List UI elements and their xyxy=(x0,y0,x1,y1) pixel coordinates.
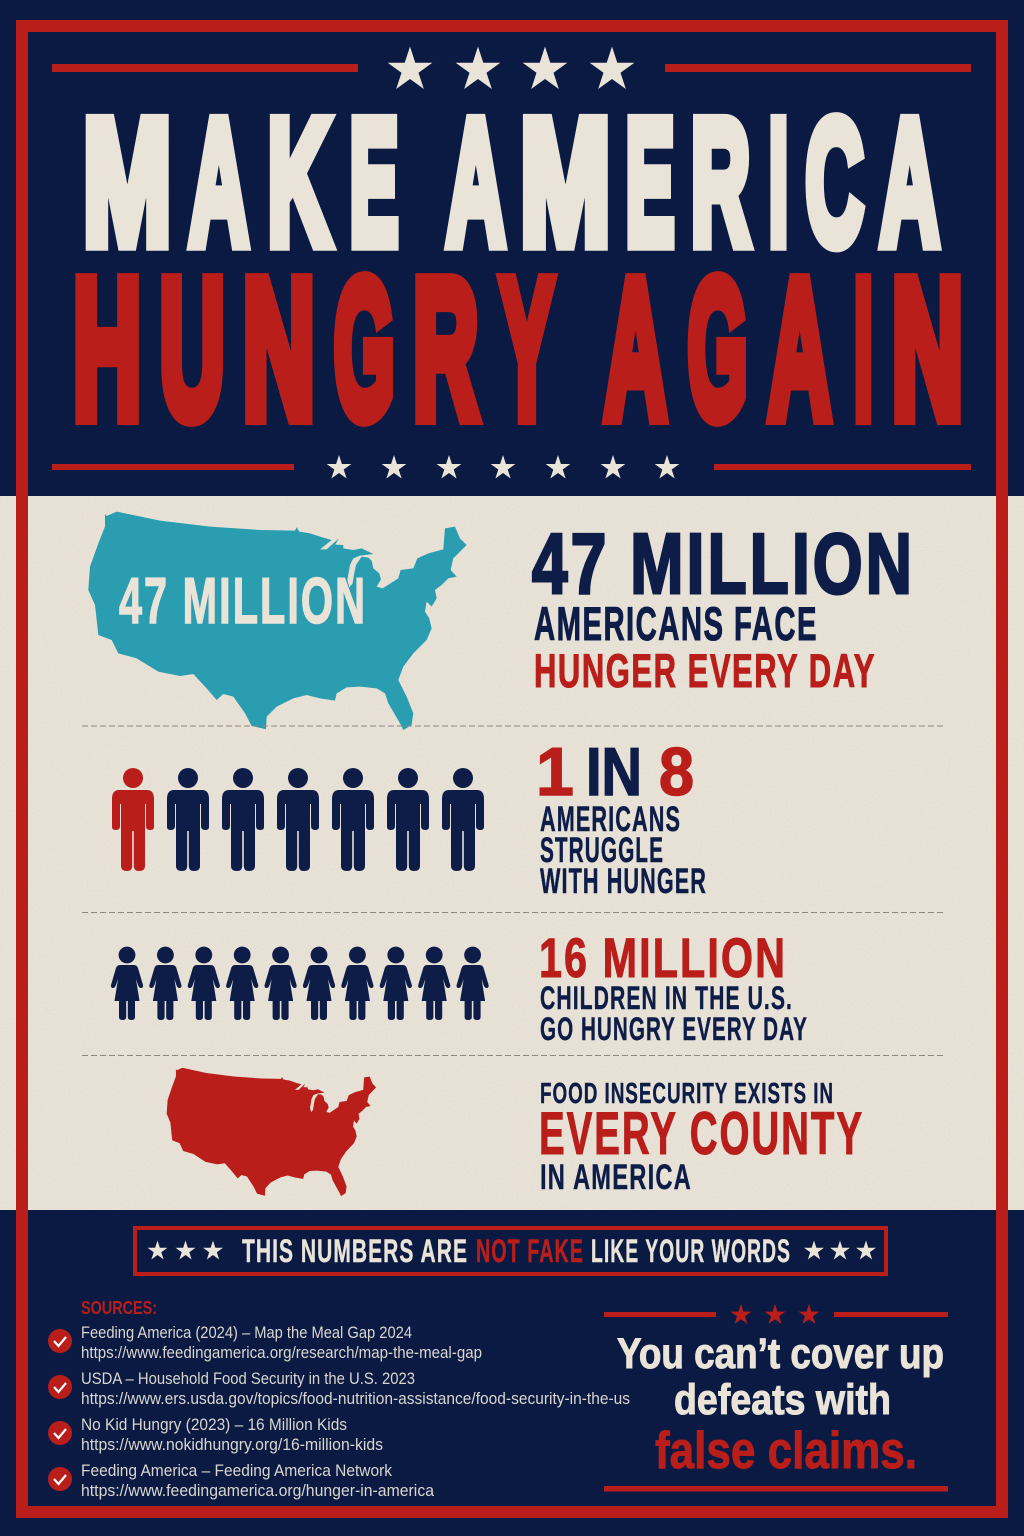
top ornament: rules and four stars xyxy=(52,46,971,89)
stat 2 text xyxy=(536,734,707,901)
source 4: Feeding America – Feeding America Network xyxy=(81,1461,392,1480)
stat 1 text xyxy=(532,517,915,697)
title: A xyxy=(189,83,248,281)
divider lines xyxy=(82,726,943,1056)
title: G xyxy=(688,240,747,458)
title: I xyxy=(854,240,873,458)
closing callout xyxy=(604,1304,948,1492)
banner xyxy=(135,1228,886,1274)
stat 4 text: FOOD INSECURITY EXISTS IN xyxy=(540,1078,834,1110)
background: navy top band xyxy=(0,0,1024,496)
title: U xyxy=(160,240,225,458)
source 2: USDA – Household Food Security in the U.S. 2023 xyxy=(81,1369,415,1388)
title: N xyxy=(243,240,315,458)
background: navy bottom band xyxy=(0,1210,1024,1536)
title: A xyxy=(768,240,831,458)
closing callout: defeats with xyxy=(674,1376,891,1424)
title: A xyxy=(446,83,505,281)
stat 3 text: 16 MILLION xyxy=(539,926,787,989)
sources list: SOURCES: xyxy=(81,1298,157,1318)
title xyxy=(73,83,963,458)
title: A xyxy=(880,83,939,281)
stat 1 text: AMERICANS FACE xyxy=(534,597,818,650)
closing callout: You can’t cover up xyxy=(617,1330,944,1378)
source 3 xyxy=(48,1415,383,1454)
background: cream middle panel xyxy=(0,496,1024,1210)
teal US map with figure: 47 MILLION xyxy=(119,564,367,637)
title: H xyxy=(73,240,141,458)
stat 2 text: 8 xyxy=(659,734,694,810)
source 4 xyxy=(48,1461,435,1500)
stat 3 text xyxy=(539,926,808,1047)
title: R xyxy=(413,240,478,458)
source 3: No Kid Hungry (2023) – 16 Million Kids xyxy=(81,1415,347,1434)
source 1 xyxy=(48,1323,482,1362)
red US map xyxy=(167,1068,376,1196)
banner: THIS NUMBERS ARE xyxy=(242,1233,468,1269)
title: E xyxy=(350,83,398,281)
closing callout: false claims. xyxy=(655,1422,917,1480)
title: K xyxy=(268,83,330,281)
stat 4 text: IN AMERICA xyxy=(540,1158,692,1197)
banner: LIKE YOUR WORDS xyxy=(591,1233,791,1269)
sources list xyxy=(48,1298,630,1500)
title: A xyxy=(604,240,666,458)
source 1: https://www.feedingamerica.org/research/map-the-meal-gap xyxy=(81,1343,482,1362)
pictogram: seven adults, one red xyxy=(112,768,484,871)
lower title ornament: rules and seven stars xyxy=(52,455,971,479)
title: Y xyxy=(500,240,553,458)
source 1: Feeding America (2024) – Map the Meal Gap 2024 xyxy=(81,1323,412,1342)
stat 3 text: CHILDREN IN THE U.S. xyxy=(540,980,793,1016)
stat 2 text: WITH HUNGER xyxy=(540,862,707,901)
stat 2 text: 1 xyxy=(536,734,574,810)
stat 3 text: GO HUNGRY EVERY DAY xyxy=(540,1011,808,1047)
title: C xyxy=(806,83,863,281)
stat 4 text xyxy=(539,1078,864,1197)
title: R xyxy=(691,83,750,281)
stat 2 text: STRUGGLE xyxy=(540,831,664,870)
stat 2 text: AMERICANS xyxy=(540,800,681,839)
banner: NOT FAKE xyxy=(476,1233,584,1269)
source 4: https://www.feedingamerica.org/hunger-in-america xyxy=(81,1481,435,1500)
stat 2 text: IN xyxy=(586,734,642,810)
source 2 xyxy=(48,1369,630,1408)
title: E xyxy=(626,83,674,281)
title: M xyxy=(520,83,610,281)
source 2: https://www.ers.usda.gov/topics/food-nutrition-assistance/food-security-in-the-us xyxy=(81,1389,630,1408)
source 3: https://www.nokidhungry.org/16-million-kids xyxy=(81,1435,383,1454)
title: M xyxy=(83,83,171,281)
title: G xyxy=(334,240,394,458)
teal US map with figure xyxy=(88,512,467,730)
pictogram: ten children xyxy=(111,947,489,1020)
title: I xyxy=(769,83,788,281)
